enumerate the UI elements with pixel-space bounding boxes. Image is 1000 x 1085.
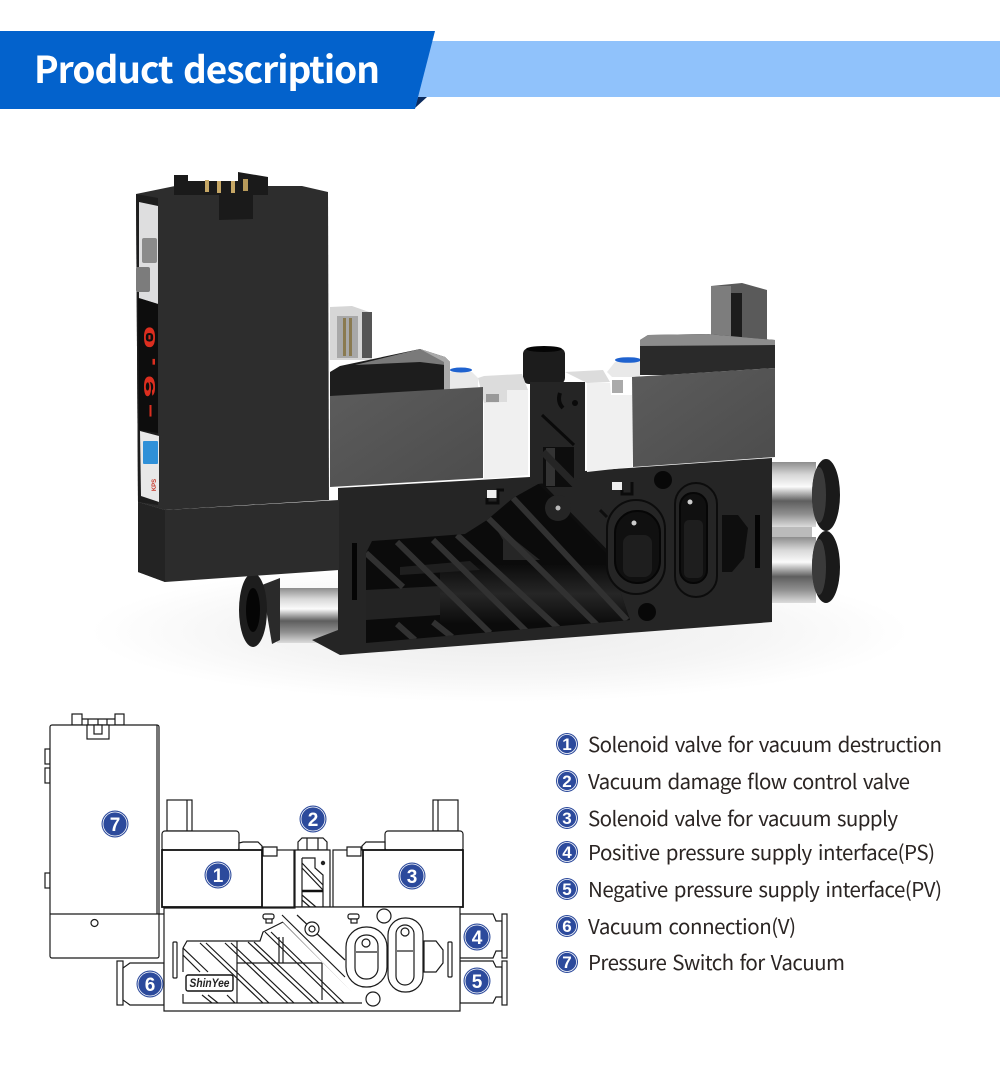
badge 1: 1 xyxy=(213,866,224,887)
product photo illustration xyxy=(136,172,840,680)
badge 7 xyxy=(102,810,128,838)
upper white label xyxy=(139,202,158,304)
legend item 1: 1 xyxy=(562,735,572,754)
title: Product description xyxy=(34,40,380,94)
legend item 4: Positive pressure supply interface(PS) xyxy=(588,836,935,866)
up button xyxy=(142,238,157,263)
outline: valve tower 2 xyxy=(295,838,330,907)
badge 5: 5 xyxy=(472,972,483,993)
solenoid right xyxy=(632,283,775,467)
ribbon fold xyxy=(415,97,427,108)
light blue ribbon xyxy=(418,41,1000,97)
white valve block left xyxy=(450,368,528,479)
legend item 5: Negative pressure supply interface(PV) xyxy=(588,873,942,903)
fittings: pressure supply xyxy=(772,459,840,603)
badge 1 xyxy=(204,862,232,888)
display xyxy=(138,298,158,433)
mounting pins xyxy=(487,490,497,498)
dark blue title plate xyxy=(0,31,435,109)
legend item 3: 3 xyxy=(562,809,572,828)
pressure switch xyxy=(136,172,339,582)
badge 5 xyxy=(464,968,490,994)
badge 6 xyxy=(136,970,164,998)
legend xyxy=(556,728,942,976)
lattice recess xyxy=(366,484,630,643)
legend item 7: 7 xyxy=(562,953,572,972)
legend item 2: 2 xyxy=(562,772,572,791)
set button xyxy=(143,441,158,464)
switch base xyxy=(138,500,339,582)
badge 6: 6 xyxy=(145,975,155,996)
brand mark: KPS xyxy=(152,479,158,491)
badge 3 xyxy=(398,862,426,890)
display reading: -9.0 xyxy=(141,325,160,423)
badge 7: 7 xyxy=(110,815,120,836)
legend item 5: 5 xyxy=(562,880,572,899)
port: oval right xyxy=(675,483,717,597)
outline: fitting 5 xyxy=(460,961,507,1005)
white valve block right xyxy=(565,357,641,472)
legend item 1: Solenoid valve for vacuum destruction xyxy=(588,728,942,758)
manifold base xyxy=(312,458,772,655)
outline: solenoid 3 xyxy=(333,800,463,907)
port oval left xyxy=(346,927,387,987)
legend item 6: 6 xyxy=(562,917,572,936)
outline: fitting 4 xyxy=(460,914,507,958)
badge 2 xyxy=(300,806,326,832)
outline: fitting 6 xyxy=(117,961,164,1005)
legend item 7: Pressure Switch for Vacuum xyxy=(588,946,845,976)
legend item 3: Solenoid valve for vacuum supply xyxy=(588,802,898,832)
switch body xyxy=(136,186,329,510)
solenoid left xyxy=(330,306,483,487)
line diagram xyxy=(45,714,507,1011)
lattice xyxy=(183,922,362,1003)
vacuum damage flow control valve xyxy=(523,346,600,521)
down button xyxy=(136,267,150,292)
legend item 2: Vacuum damage flow control valve xyxy=(588,765,910,795)
badge 2: 2 xyxy=(308,810,318,831)
logo plate: ShinYee xyxy=(190,976,230,990)
legend item 6: Vacuum connection(V) xyxy=(588,910,796,940)
badge 3: 3 xyxy=(407,867,417,888)
badge 4: 4 xyxy=(472,928,483,949)
fitting: vacuum connection xyxy=(239,573,342,647)
port oval right xyxy=(388,918,423,992)
outline: manifold xyxy=(164,907,460,1011)
switch connector xyxy=(174,172,268,220)
outline: solenoid 1 xyxy=(162,800,294,907)
outline: pressure switch xyxy=(45,714,164,958)
right rib xyxy=(540,470,620,565)
ground shadow xyxy=(90,562,910,702)
port: oval left xyxy=(607,500,665,594)
badge 4 xyxy=(464,924,490,950)
header banner xyxy=(0,31,1000,109)
lower white label xyxy=(140,431,159,502)
legend item 4: 4 xyxy=(562,843,572,862)
